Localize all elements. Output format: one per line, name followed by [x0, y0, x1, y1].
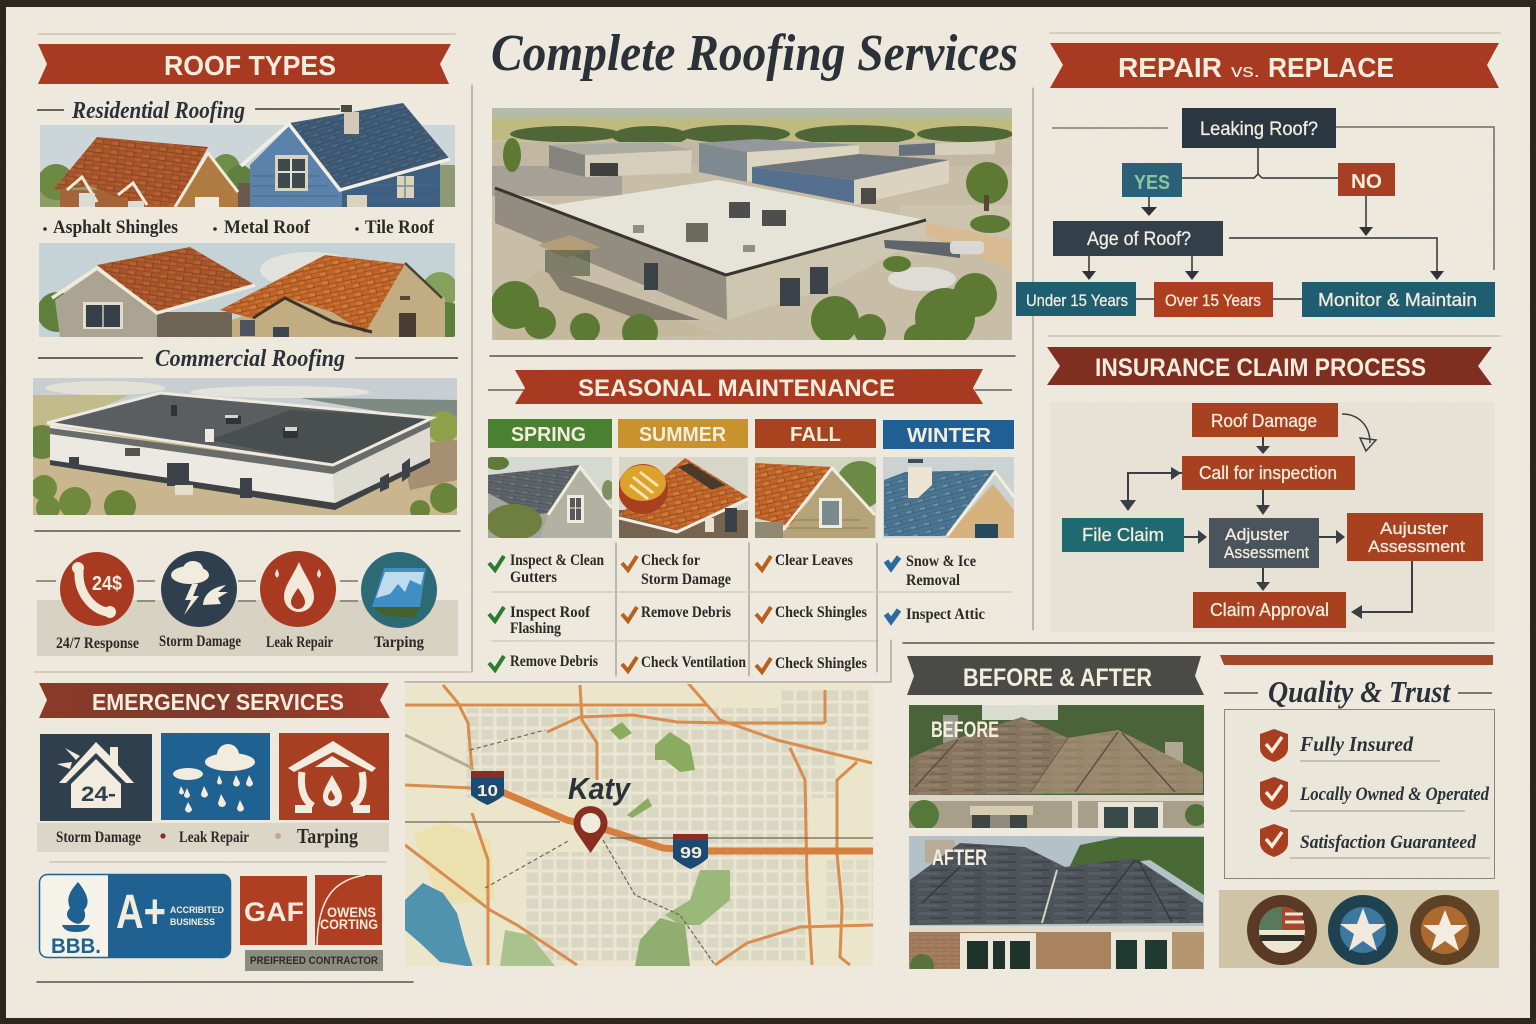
decision: age of roof: [1053, 221, 1223, 256]
tab: winter: WINTER: [907, 425, 992, 447]
checklist: summer: [622, 552, 746, 671]
tab: fall: [755, 419, 876, 448]
badge: BBB accredited: BBB.: [51, 935, 101, 958]
service icons row: [36, 551, 458, 656]
badge: bronze star seal: [1410, 895, 1480, 965]
title: Complete Roofing Services: [491, 25, 1018, 82]
badge: blue star seal: [1328, 895, 1398, 965]
checklist: fall: Check Shingles: [775, 655, 867, 672]
step: call for inspection: Call for inspection: [1199, 463, 1337, 483]
panel: seasonal maintenance: [485, 369, 1015, 672]
tab: spring: SPRING: [511, 424, 586, 446]
badge: GAF: [240, 876, 307, 945]
process background: [1050, 402, 1495, 632]
icon: 24/7 response phone: [60, 552, 134, 626]
photo: before roof: [909, 705, 1207, 830]
tile labels strip: Tarping: [297, 824, 358, 848]
map: Katy service area: [405, 683, 873, 967]
decision: age of roof: Age of Roof?: [1087, 229, 1191, 250]
checklist: winter: [886, 553, 985, 623]
outcome: under 15 years: [1016, 282, 1136, 316]
roof type labels: [43, 217, 435, 238]
step: call for inspection: [1182, 456, 1355, 490]
tile labels strip: [37, 823, 389, 852]
roof type labels: Asphalt Shingles: [53, 217, 178, 238]
heading: quality and trust: Quality & Trust: [1268, 674, 1451, 709]
panel: before and after: [907, 656, 1207, 978]
icon: tarping: [361, 552, 437, 628]
illustration: winter house: [883, 457, 1015, 538]
checklist: fall: [756, 552, 867, 672]
checklist: summer: Remove Debris: [641, 604, 731, 621]
panel: quality and trust: [1219, 655, 1499, 968]
step: claim approval: [1193, 592, 1346, 628]
icon: 24/7 response phone: 24$: [92, 573, 122, 595]
illustration: summer house with sun: [618, 457, 748, 538]
item: satisfaction guaranteed: Satisfaction Guaranteed: [1300, 832, 1476, 853]
item: locally owned: [1260, 777, 1489, 810]
banner: repair vs replace: [1050, 43, 1499, 88]
step: file claim: File Claim: [1082, 525, 1164, 545]
answer: yes: YES: [1134, 172, 1170, 194]
checklist: spring: [489, 552, 604, 670]
checklist: spring: Flashing: [510, 620, 561, 637]
outcome: over 15 years: Over 15 Years: [1165, 291, 1261, 310]
step: adjuster assessment: [1209, 518, 1319, 568]
photo: after roof: [909, 836, 1204, 978]
checklist: spring: Remove Debris: [510, 653, 598, 670]
banner: repair vs replace: REPAIR: [1118, 52, 1222, 83]
icon: location pin: [574, 806, 608, 853]
tile labels strip: Leak Repair: [179, 829, 249, 846]
banner: before and after: [907, 656, 1204, 695]
badge: preferred contractor: [245, 950, 383, 971]
icon labels: 24/7 Response: [56, 635, 139, 652]
illustration: fall house: [755, 457, 884, 538]
tab: summer: [618, 419, 748, 448]
column: winter: [883, 420, 1015, 623]
badge: BBB accredited: BUSINESS: [170, 917, 215, 928]
banner: before and after: BEFORE & AFTER: [963, 664, 1152, 692]
answer: no: [1338, 163, 1395, 196]
step: aujuster assessment: [1347, 513, 1483, 561]
badge: Owens Corning: CORTING: [320, 917, 378, 932]
step: adjuster assessment: Adjuster: [1225, 525, 1289, 544]
decision: leaking roof: [1182, 108, 1336, 148]
badge: BBB accredited: ACCRIBITED: [170, 905, 224, 916]
outcome: under 15 years: Under 15 Years: [1026, 291, 1128, 310]
tile labels strip: Storm Damage: [56, 829, 141, 846]
badge: Owens Corning: [315, 875, 382, 945]
tab: fall: FALL: [790, 424, 841, 446]
answer: yes: [1122, 163, 1182, 197]
heading: residential roofing: Residential Roofing: [71, 98, 245, 124]
label: Katy: Katy: [568, 771, 632, 806]
panel: repair vs replace: [1016, 43, 1499, 317]
column: summer: [618, 419, 748, 671]
outcome: over 15 years: [1154, 282, 1273, 317]
step: adjuster assessment: Assessment: [1224, 543, 1309, 562]
illustration: commercial flat roof building: [25, 378, 460, 522]
item: locally owned: Locally Owned & Operated: [1299, 784, 1489, 805]
outcome: monitor and maintain: Monitor & Maintain: [1318, 290, 1477, 310]
answer: no: NO: [1351, 171, 1382, 193]
checklist: fall: Clear Leaves: [775, 552, 853, 569]
illustration: aerial commercial buildings: [491, 108, 1013, 352]
checklist: spring: Inspect Roof: [510, 604, 591, 621]
checklist: summer: Check Ventilation: [641, 654, 746, 671]
badge: Owens Corning: OWENS: [327, 905, 376, 920]
step: file claim: [1062, 518, 1184, 552]
illustration: spring house: [485, 456, 614, 540]
icon strip background: [37, 600, 458, 656]
tab: summer: SUMMER: [639, 424, 727, 446]
banner: emergency services: EMERGENCY SERVICES: [92, 689, 344, 715]
icon labels: Leak Repair: [266, 634, 333, 651]
illustration: residential houses row two: [37, 243, 465, 338]
banner: seasonal maintenance: SEASONAL MAINTENANCE: [578, 375, 895, 402]
checklist: spring: Inspect & Clean: [510, 552, 604, 569]
step: roof damage: Roof Damage: [1211, 411, 1317, 431]
panel: insurance claim process: [1047, 347, 1495, 632]
tab: spring: [488, 419, 612, 448]
column: fall: [755, 419, 884, 672]
checklist: winter: Removal: [906, 572, 960, 589]
flowchart connectors: [1052, 127, 1494, 299]
certification badges strip: [1219, 890, 1499, 968]
item: fully insured: [1260, 729, 1413, 762]
road shield: interstate 99: [673, 834, 708, 869]
panel: emergency services: [37, 683, 390, 971]
accent bar: [1220, 655, 1493, 665]
roof type labels: Tile Roof: [365, 217, 435, 238]
tile: storm damage house: 24-: [81, 783, 116, 806]
checklist: summer: Check for: [641, 552, 700, 569]
tile: leak repair rain cloud: [161, 733, 270, 820]
road shield: interstate 10: 10: [477, 783, 498, 800]
step: roof damage: [1192, 403, 1338, 437]
tab: winter: [883, 420, 1014, 449]
decision: leaking roof: Leaking Roof?: [1200, 119, 1318, 140]
banner: seasonal maintenance: [488, 369, 1012, 404]
outcome: monitor and maintain: [1302, 282, 1495, 317]
road shield: interstate 99: 99: [680, 845, 702, 862]
trust list box: [1224, 710, 1494, 878]
checklist: winter: Inspect Attic: [906, 606, 985, 623]
tile: tarping house with drop: [279, 733, 389, 820]
banner: roof types: ROOF TYPES: [164, 50, 336, 81]
badge: BBB accredited: A+: [116, 886, 166, 939]
checklist: summer: Storm Damage: [641, 571, 731, 588]
banner: insurance claim process: [1047, 347, 1492, 385]
banner: repair vs replace: REPLACE: [1268, 52, 1394, 83]
banner: insurance claim process: INSURANCE CLAIM PROCESS: [1095, 354, 1426, 382]
item: satisfaction guaranteed: [1260, 824, 1476, 857]
process arrowheads: [1120, 438, 1376, 619]
banner: repair vs replace: vs.: [1231, 61, 1260, 81]
road shield: interstate 10: [471, 771, 504, 805]
illustration: residential houses row one: [38, 103, 460, 207]
badge: GAF: GAF: [244, 897, 304, 927]
heading: commercial roofing: Commercial Roofing: [155, 346, 345, 372]
checklist: winter: Snow & Ice: [906, 553, 976, 570]
icon: storm damage cloud: [161, 551, 237, 627]
icon labels: [56, 633, 424, 652]
checklist: spring: Gutters: [510, 569, 557, 586]
roof type labels: Metal Roof: [224, 217, 311, 238]
banner: roof types: [38, 44, 451, 84]
badge: BBB accredited: [40, 874, 230, 958]
icon labels: Storm Damage: [159, 633, 241, 650]
photo: before roof: BEFORE: [931, 717, 999, 742]
badge: flag seal: [1247, 895, 1317, 965]
badge: preferred contractor: PREIFREED CONTRACTOR: [250, 955, 378, 967]
icon labels: Tarping: [374, 634, 424, 651]
panel: roof types: [25, 44, 465, 656]
step: aujuster assessment: Assessment: [1368, 537, 1465, 556]
banner: emergency services: [39, 683, 390, 718]
step: claim approval: Claim Approval: [1210, 600, 1329, 620]
column: spring: [485, 419, 614, 670]
icon: leak repair drop: [260, 551, 336, 627]
checklist: fall: Check Shingles: [775, 604, 867, 621]
icon connector dashes: [36, 581, 358, 601]
process connectors: [1128, 414, 1412, 612]
photo: after roof: AFTER: [932, 845, 987, 870]
item: fully insured: Fully Insured: [1299, 732, 1413, 756]
tile: storm damage house: [40, 734, 152, 821]
flowchart arrowheads: [1082, 207, 1444, 280]
step: aujuster assessment: Aujuster: [1380, 519, 1448, 538]
